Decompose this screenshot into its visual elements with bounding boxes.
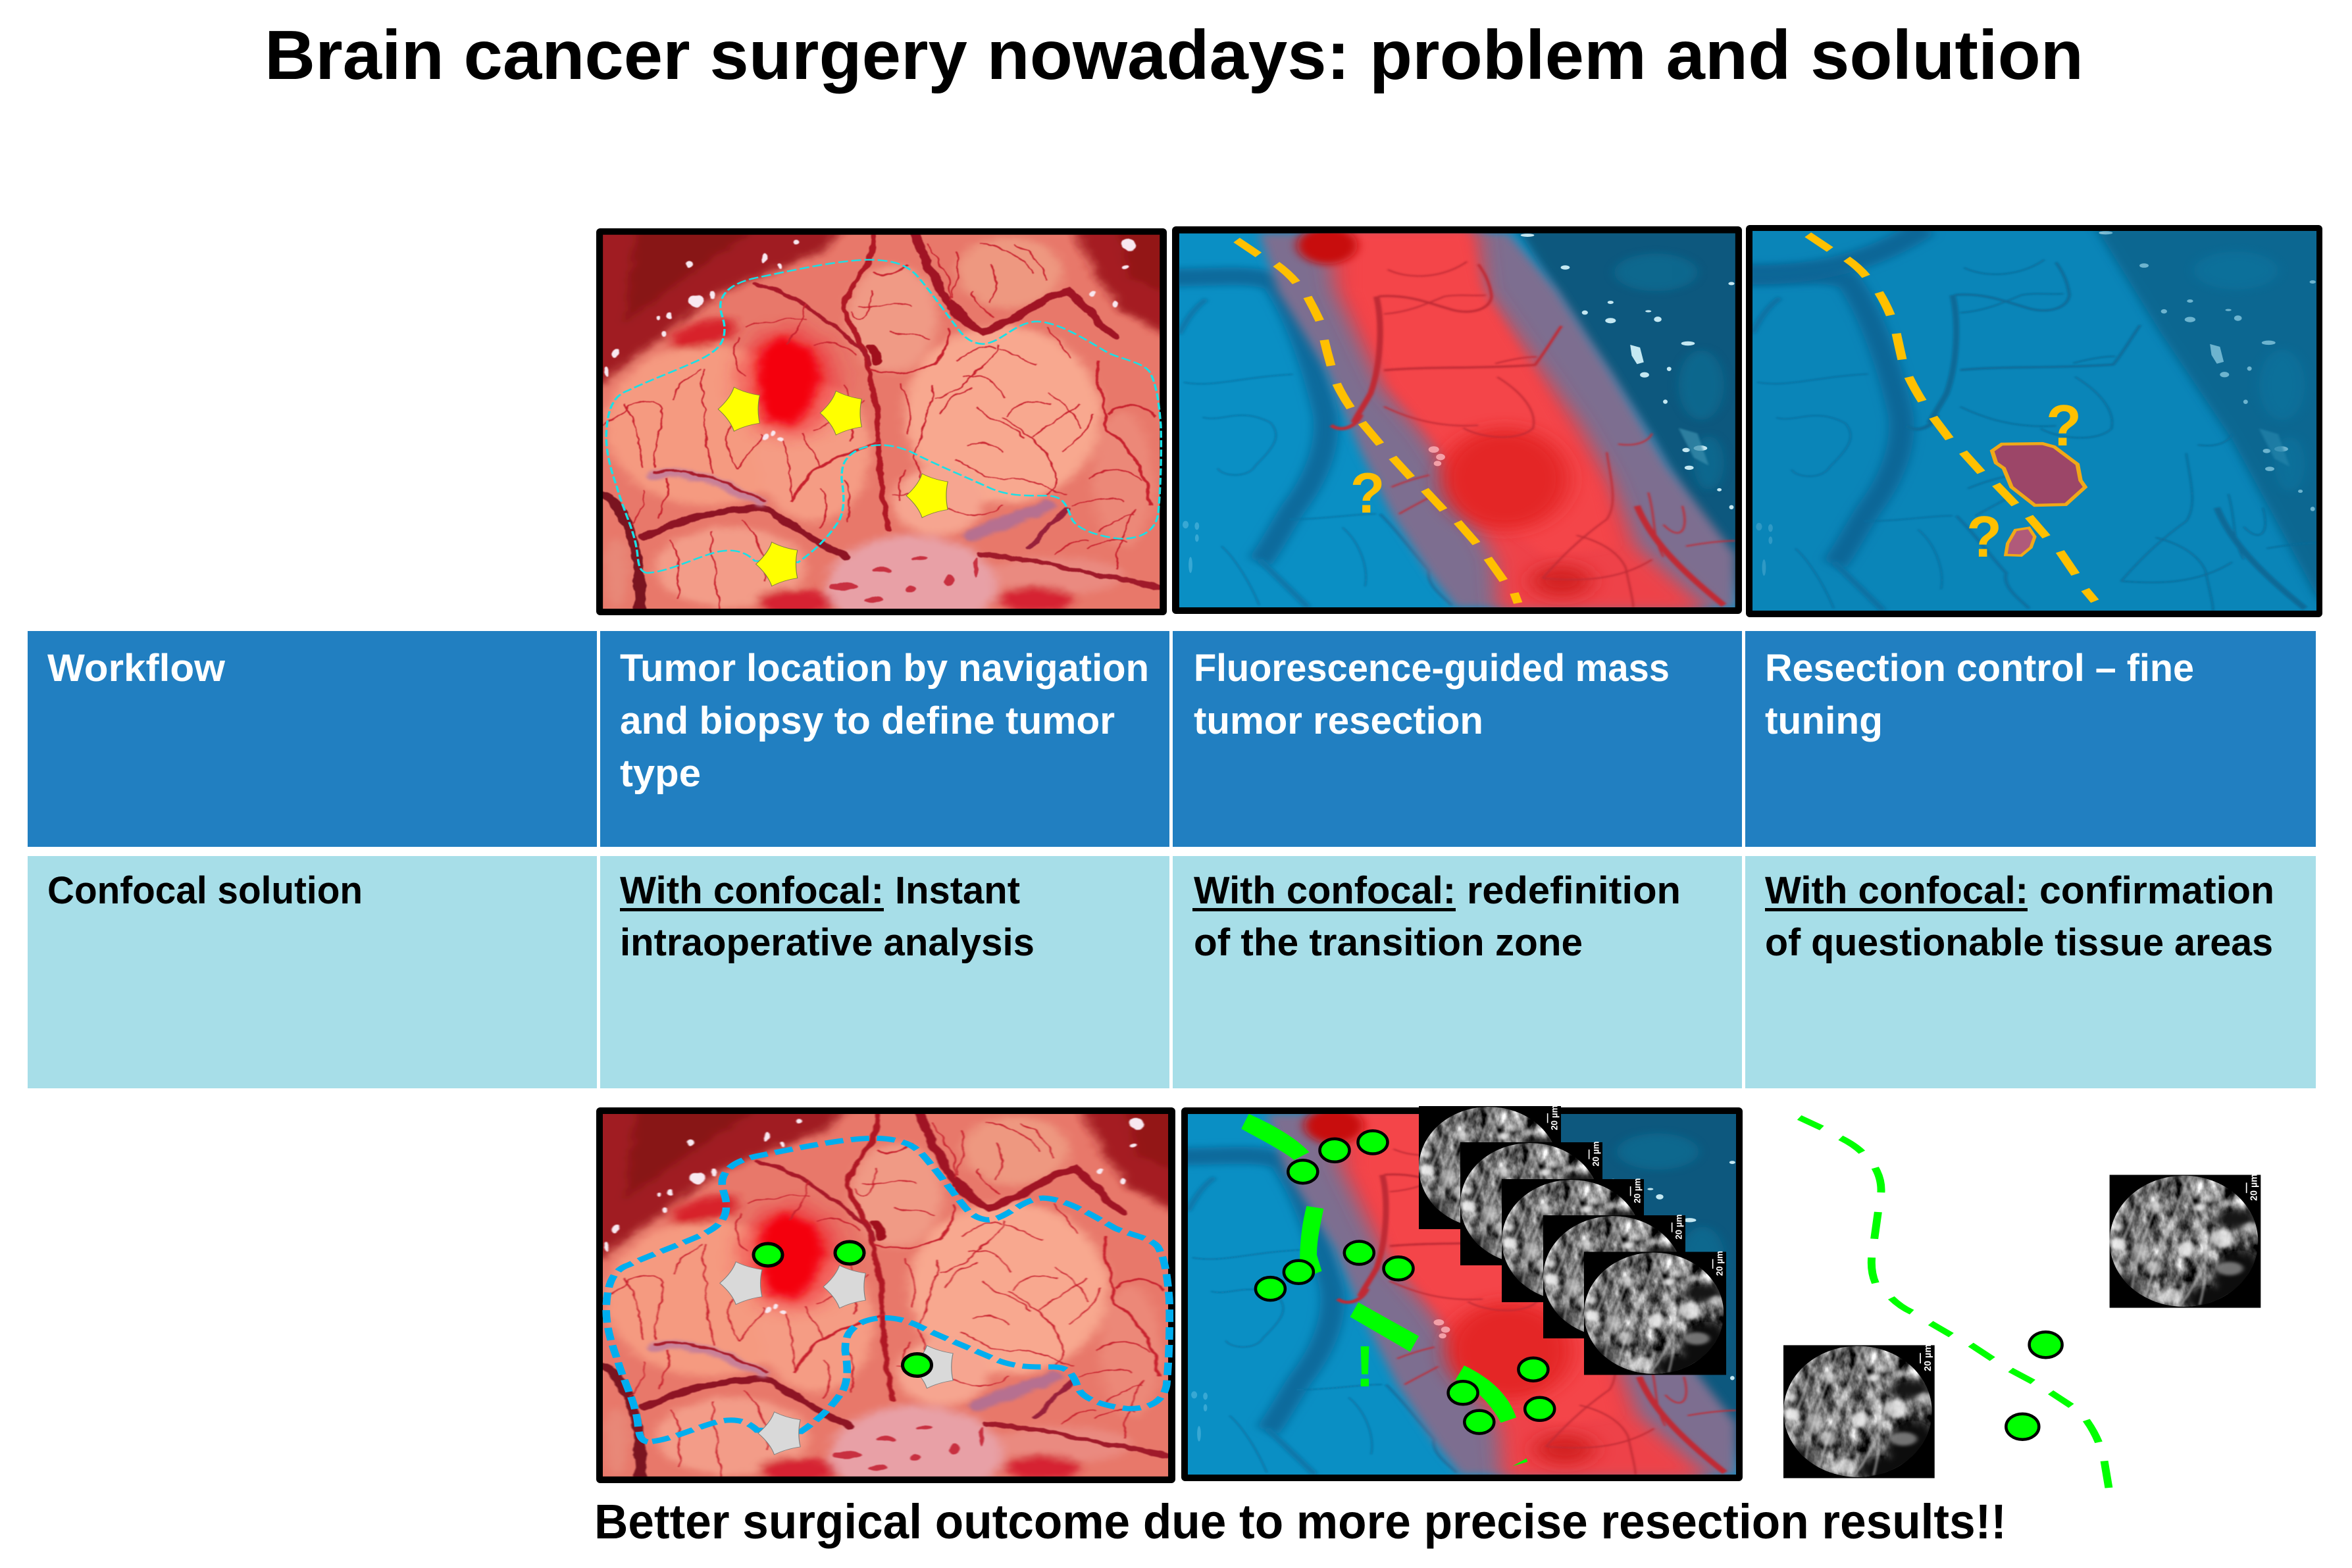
- icons: grey stars: [720, 1262, 953, 1455]
- photo: white-light blue view: [1738, 224, 2336, 617]
- table: confocal solution row: [28, 856, 2316, 1088]
- icons: yellow navigation stars: [718, 387, 948, 586]
- micrograph 1: [1412, 1105, 1565, 1234]
- green biopsy dots: [2006, 1332, 2062, 1440]
- question mark: ?: [1350, 462, 1385, 525]
- micrograph upper right: [2102, 1174, 2265, 1313]
- cell: transition zone: With confocal:: [1194, 869, 1456, 912]
- micrograph 3: [1495, 1178, 1648, 1307]
- panel: confocal tumor location photo: [578, 1098, 1192, 1504]
- cell: fluorescence-guided resection: [1173, 631, 1742, 847]
- micrograph 5: 20 µm: [1714, 1251, 1725, 1276]
- cell: tumor location: [600, 631, 1169, 847]
- micrograph lower left: 20 µm: [1923, 1344, 1933, 1371]
- question mark lower: ?: [1966, 504, 2002, 569]
- cell: resection control: Resection control – fine: [1765, 647, 2194, 690]
- dashed yellow resection line: [1808, 235, 2095, 601]
- cell: transition zone: [1173, 856, 1742, 1088]
- cell: confocal label: Confocal solution: [47, 869, 363, 912]
- cell: confocal label: [28, 856, 597, 1088]
- cell: tumor location: and biopsy to define tumor: [620, 699, 1115, 742]
- panel: confocal transition zone photo: [1174, 1105, 1754, 1481]
- residual tumor area small: [2006, 528, 2035, 555]
- cell: tumor location: type: [620, 752, 701, 795]
- tumor boundary: cyan dashed outline: [606, 260, 1161, 573]
- residual tumor area large: [1992, 443, 2085, 505]
- cell: instant analysis: [600, 856, 1169, 1088]
- cell: fluorescence-guided resection: tumor resection: [1194, 699, 1483, 742]
- cell: transition zone: redefinition: [1467, 869, 1681, 912]
- cell: transition zone: of the transition zone: [1194, 921, 1583, 964]
- micrograph 5: [1577, 1251, 1730, 1379]
- micrograph 1: 20 µm: [1549, 1105, 1560, 1130]
- micrograph lower left: [1776, 1344, 1939, 1483]
- cell: questionable tissue: confirmation: [2039, 869, 2274, 912]
- redefined transition zone: green segments: [1241, 1114, 1527, 1466]
- micrograph 3: 20 µm: [1632, 1178, 1643, 1203]
- residual tissue and dashed line: [1808, 235, 2095, 601]
- panel: resection control photo: [1738, 224, 2336, 617]
- cell: questionable tissue: [1745, 856, 2316, 1088]
- photo: fluorescence view: [1174, 1107, 1754, 1480]
- panel: confocal confirmation of questionable tissue: [1776, 1117, 2265, 1488]
- micrograph 2: 20 µm: [1591, 1142, 1601, 1167]
- cell: workflow label: [28, 631, 597, 847]
- photo frame: [1172, 226, 1742, 614]
- cell: workflow label: Workflow: [47, 647, 226, 690]
- cell: questionable tissue: With confocal:: [1765, 869, 2028, 912]
- title: Brain cancer surgery nowadays: problem and solution: [265, 16, 2084, 94]
- cell: instant analysis: With confocal:: [620, 869, 884, 912]
- stack of confocal micrographs: [1412, 1105, 1730, 1379]
- panel: tumor location photo: [579, 218, 1183, 638]
- dashed yellow resection line: [1237, 240, 1518, 603]
- green confocal biopsy dots: [754, 1242, 932, 1377]
- cell: resection control: [1745, 631, 2316, 847]
- photo: exposed brain surface: [579, 218, 1183, 638]
- exclamation mark: !: [1355, 1334, 1375, 1399]
- micrograph 4: 20 µm: [1674, 1215, 1684, 1240]
- micrograph 4: [1536, 1215, 1689, 1343]
- photo: fluorescence view: [1165, 226, 1754, 613]
- cell: questionable tissue: of questionable tissue areas: [1765, 921, 2273, 964]
- photo frame: [596, 228, 1167, 615]
- cell: instant analysis: intraoperative analysis: [620, 921, 1035, 964]
- photo frame: [1181, 1107, 1743, 1481]
- photo: exposed brain surface: [578, 1098, 1192, 1504]
- micrograph 2: [1453, 1142, 1606, 1270]
- photo frame: [596, 1107, 1175, 1483]
- tumor boundary: blue dashed outline: [606, 1138, 1169, 1442]
- cell: resection control: tuning: [1765, 699, 1883, 742]
- conclusion text: Better surgical outcome due to more precise resection results!!: [594, 1494, 2007, 1549]
- photo frame: [1746, 225, 2322, 617]
- micrograph upper right: 20 µm: [2249, 1174, 2260, 1201]
- table: workflow row: [28, 631, 2316, 847]
- green confocal biopsy dots: [1256, 1130, 1554, 1434]
- cell: tumor location: Tumor location by navigation: [620, 647, 1149, 690]
- question mark upper: ?: [2046, 393, 2082, 458]
- panel: fluorescence-guided resection photo: [1165, 226, 1754, 614]
- cell: fluorescence-guided resection: Fluorescence-guided mass: [1194, 647, 1670, 690]
- green dashed resection line: [1799, 1117, 2109, 1488]
- cell: instant analysis: Instant: [895, 869, 1020, 912]
